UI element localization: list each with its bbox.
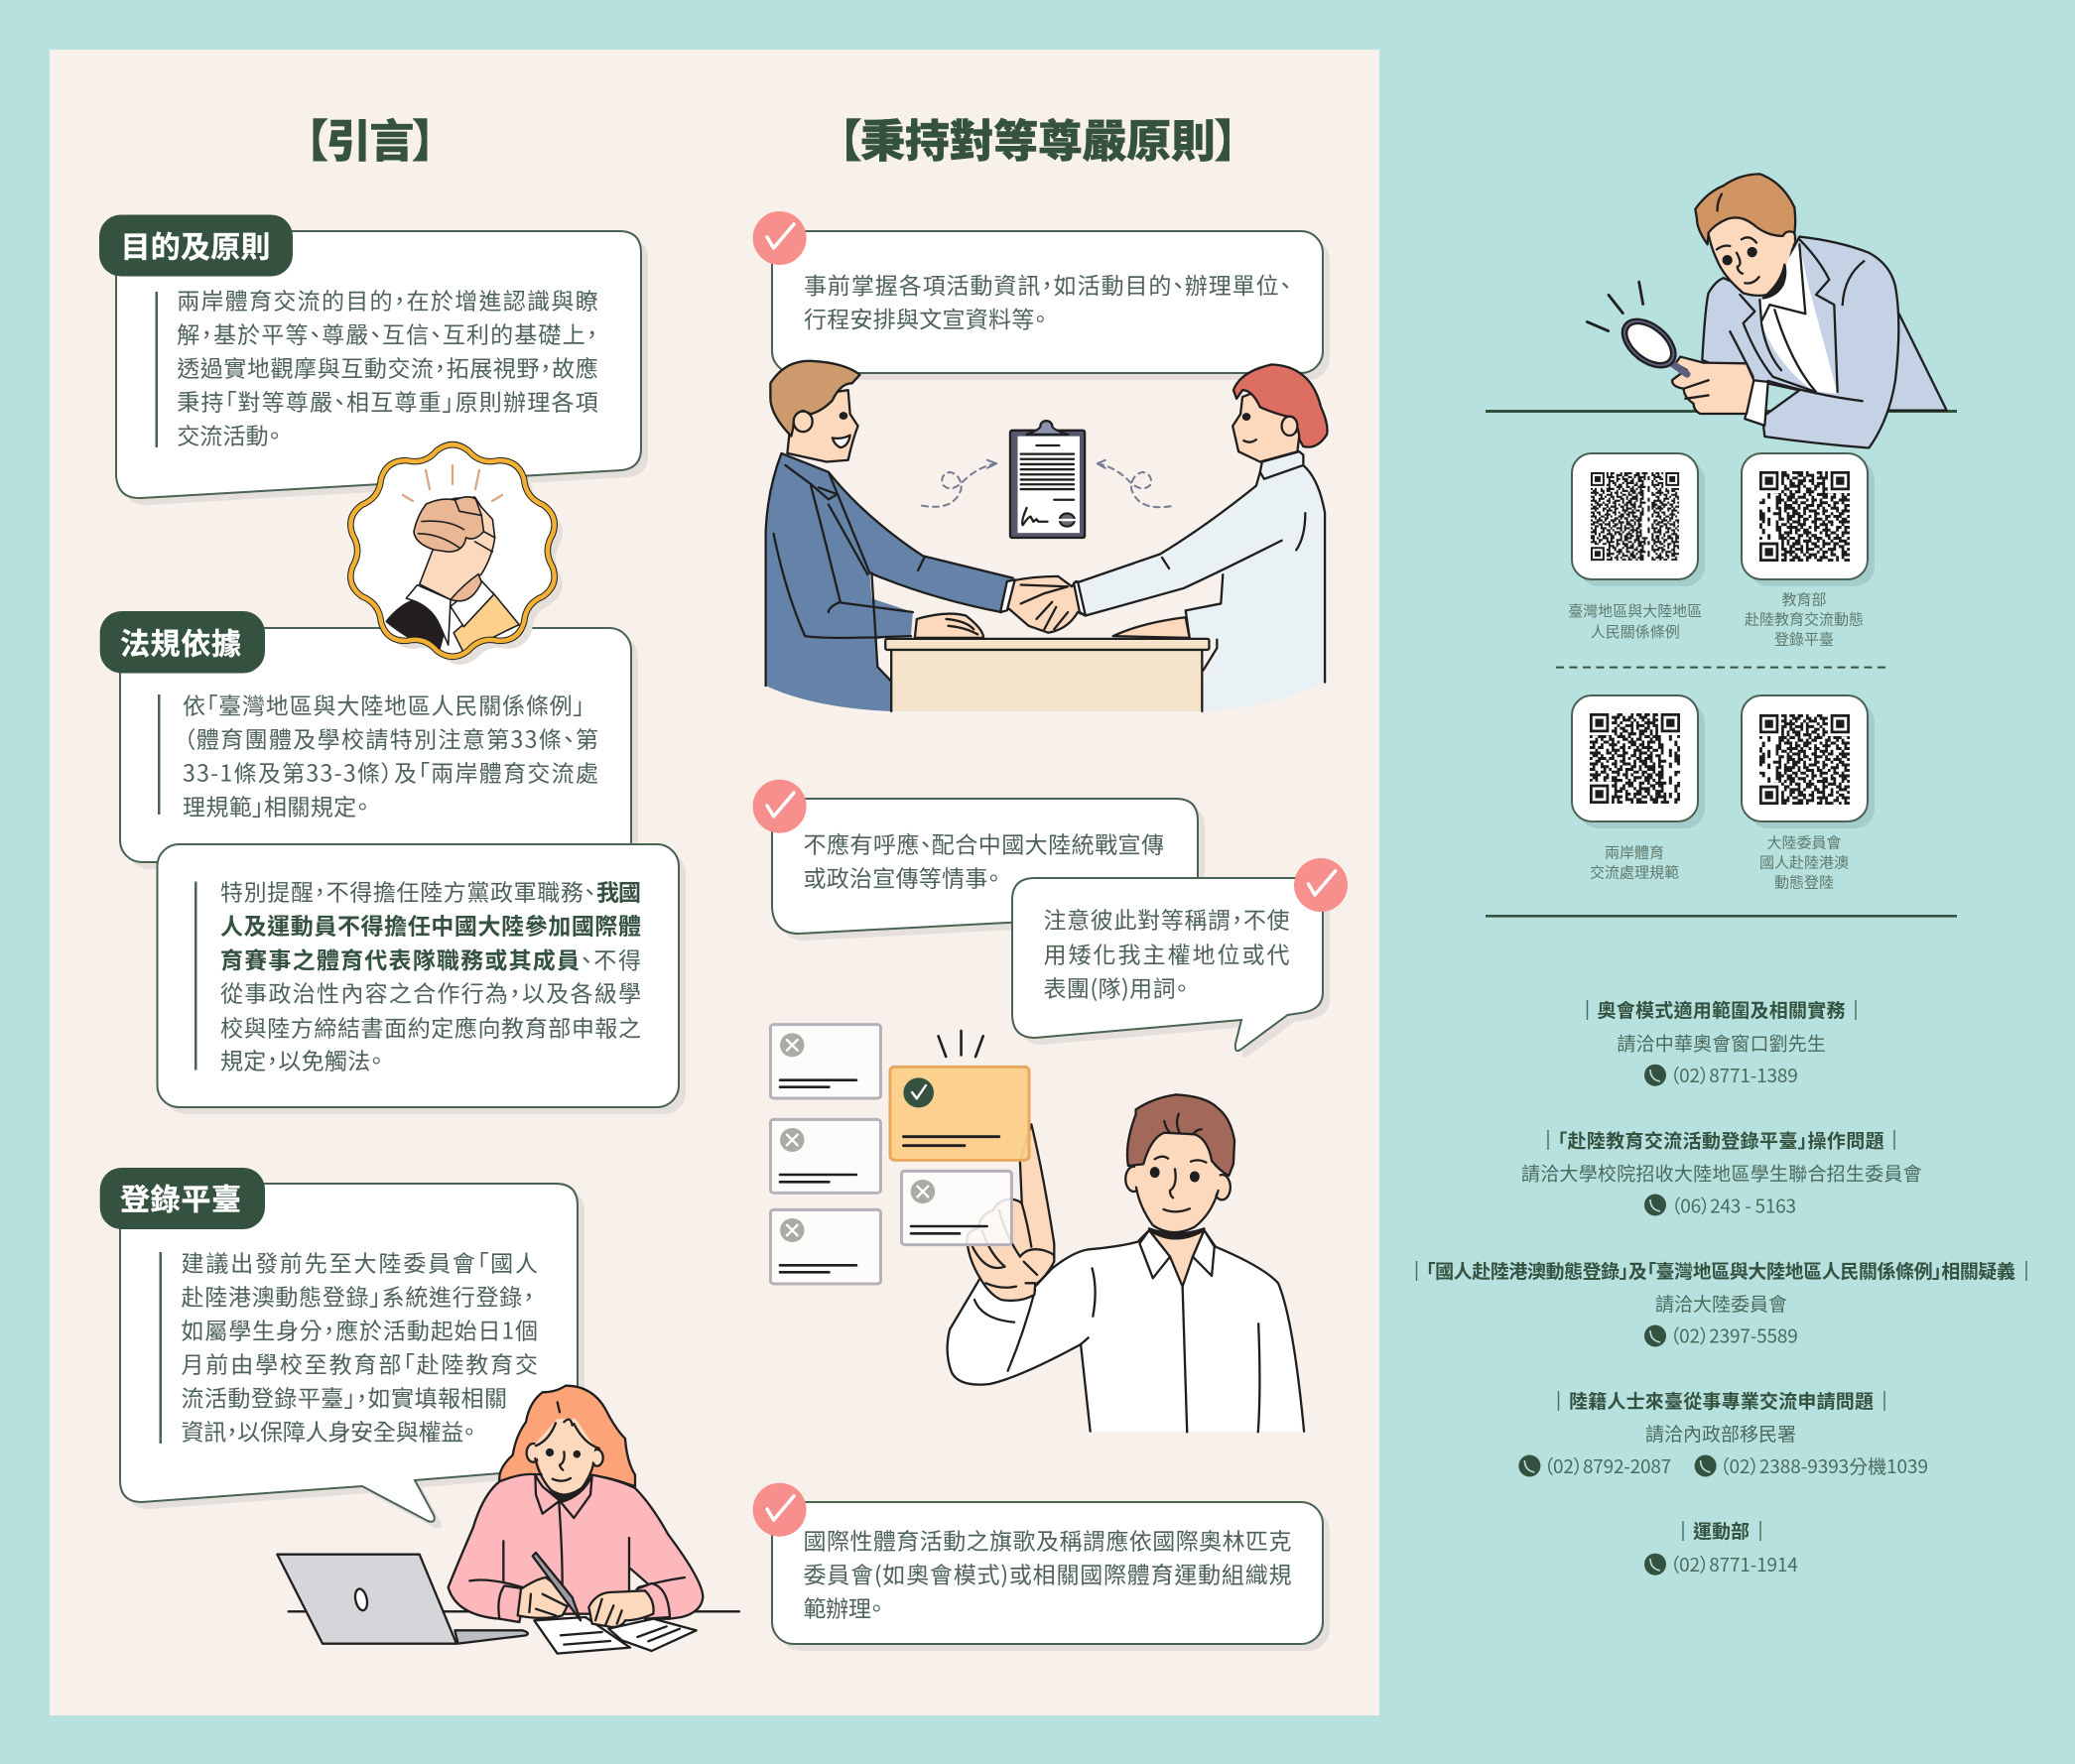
panel: 不應有呼應: [753, 780, 1205, 941]
contact: 赴陸教育交流活動登錄平臺: 「赴陸教育交流活動登錄平臺」操作問題: [1558, 1127, 1884, 1154]
text: 登錄平臺 body: 資訊，以保障人身安全與權益。: [181, 1414, 474, 1448]
contact: 陸籍人士來臺: [1518, 1387, 1928, 1479]
contact: 陸籍人士來臺: （02）8792-2087: [1544, 1452, 1671, 1479]
caption: 兩岸體育: [1605, 841, 1664, 862]
text: 國際性體育活動: 委員會(如奧會模式)或相關國際體育運動組織規: [804, 1557, 1292, 1590]
dashed divider: [1556, 667, 1886, 669]
text: 注意彼此對等稱謂: 用矮化我主權地位或代: [1044, 936, 1290, 969]
text: 事前掌握: [804, 267, 1291, 334]
tag: 目的及原則: 目的及原則: [121, 222, 270, 266]
main panel: [50, 50, 1379, 1715]
tag: 登錄平臺: [100, 1168, 265, 1229]
caption: 赴陸教育交流動態: [1745, 609, 1864, 630]
icon: check badge: [753, 211, 807, 265]
text: 注意彼此對等稱謂: [1044, 902, 1290, 1003]
text: 特別提醒 body: 特別提醒，不得擔任陸方黨政軍職務、: [220, 873, 595, 907]
illustration: man choosing cards: [770, 1025, 1304, 1432]
text: 不應有呼應: [804, 826, 1164, 894]
caption: 國人赴陸港澳: [1759, 852, 1849, 873]
caption: 動態登陸: [1774, 872, 1834, 893]
text: 特別提醒 body: 校與陸方締結書面約定應向教育部申報之: [220, 1009, 641, 1043]
contact: 運動部: [1644, 1517, 1798, 1577]
title: 引言: 【引言】: [306, 105, 435, 170]
contact: 陸籍人士來臺: 陸籍人士來臺從事專業交流申請問題: [1569, 1387, 1874, 1414]
text: 特別提醒 body: 從事政治性內容之合作行為，以及各級學: [220, 975, 641, 1009]
text: 特別提醒 body: 人及運動員不得擔任中國大陸參加國際體: [220, 908, 641, 942]
panel: 登錄平臺: [100, 1168, 584, 1529]
text: 國際性體育活動: 範辦理。: [804, 1589, 882, 1623]
illustration: man with magnifier: [1486, 174, 1957, 448]
icon: phone: [1695, 1454, 1717, 1476]
contact: 運動部: 運動部: [1693, 1517, 1750, 1544]
contact: 赴陸教育交流活動登錄平臺: （06）243 - 5163: [1671, 1193, 1796, 1219]
text: 目的及原則 body: 透過實地觀摩與互動交流，拓展視野，故應: [177, 350, 598, 384]
caption: 大陸委員會: [1766, 832, 1842, 853]
contact: 奧會模式: 請洽中華奧會窗口劉先生: [1617, 1030, 1826, 1057]
title: 秉持對等尊嚴原則: 【秉持對等尊嚴原則】: [839, 105, 1237, 170]
panel: 事前掌握: [753, 211, 1330, 380]
tag: 目的及原則: [99, 214, 293, 276]
contact: 奧會模式: （02）8771-1389: [1670, 1062, 1798, 1088]
text: 目的及原則 body: 解，基於平等、尊嚴、互信、互利的基礎上，: [177, 316, 597, 350]
text: 目的及原則 body: [177, 283, 598, 451]
text: 目的及原則 body: 兩岸體育交流的目的，在於增進認識與瞭: [177, 283, 598, 316]
text: 登錄平臺 body: 流活動登錄平臺」，如實填報相關: [181, 1380, 507, 1414]
text: 法規依據 body: （體育團體及學校請特別注意第33條、第: [184, 721, 598, 755]
contact: 國人赴陸港澳動態登錄: [1417, 1257, 2026, 1349]
illustration: handshake with contract: [766, 361, 1327, 711]
contact: 奧會模式: [1588, 996, 1856, 1088]
text: 特別提醒 body: 我國: [596, 873, 641, 907]
text: 注意彼此對等稱謂: 表團(隊)用詞。: [1044, 969, 1187, 1003]
panel: 目的及原則: [99, 214, 648, 505]
icon: check badge: [1294, 858, 1348, 912]
icon: phone: [1644, 1554, 1666, 1575]
tag: 登錄平臺: 登錄平臺: [120, 1175, 241, 1218]
text: 特別提醒 body: [220, 873, 641, 1076]
text: 特別提醒 body: 規定，以免觸法。: [220, 1043, 382, 1076]
text: 法規依據 body: 依「臺灣地區與大陸地區人民關係條例」: [183, 688, 584, 721]
panel: 法規依據: [100, 611, 638, 869]
contact: 國人赴陸港澳動態登錄: 「國人赴陸港澳動態登錄」及「臺灣地區與大陸地區人民關係條例」相關疑義: [1426, 1257, 2015, 1284]
illustration part: option cards: [770, 1025, 1011, 1284]
text: 登錄平臺 body: 月前由學校至教育部「赴陸教育交: [181, 1346, 538, 1380]
text: 登錄平臺 body: [181, 1244, 538, 1448]
icon: phone: [1518, 1454, 1540, 1476]
caption: 臺灣地區與大陸地區: [1568, 600, 1702, 621]
contact: 奧會模式: 奧會模式適用範圍及相關實務: [1598, 996, 1846, 1023]
text: 法規依據 body: 理規範」相關規定。: [183, 789, 368, 822]
icon: clasped hands badge: [350, 444, 563, 665]
QR card: 赴陸教育交流動態登錄平臺: [1742, 453, 1875, 650]
contact: 陸籍人士來臺: （02）2388-9393分機1039: [1720, 1452, 1928, 1479]
caption: 人民關係條例: [1591, 621, 1680, 642]
text: 特別提醒 body: 育賽事之體育代表隊職務或其成員: [220, 942, 580, 975]
panel: 國際性體育活動: [753, 1483, 1330, 1651]
contact: 陸籍人士來臺: 請洽內政部移民署: [1645, 1420, 1796, 1447]
text: 特別提醒 body: 、不得: [581, 942, 641, 975]
caption: 登錄平臺: [1774, 629, 1834, 650]
panel: 特別提醒: [157, 844, 686, 1114]
QR card: 兩岸體育交流處理規範: [1572, 695, 1705, 883]
icon: phone: [1644, 1065, 1666, 1086]
contact: 赴陸教育交流活動登錄平臺: 請洽大學校院招收大陸地區學生聯合招生委員會: [1521, 1160, 1922, 1187]
icon: check badge: [753, 780, 807, 833]
text: 登錄平臺 body: 赴陸港澳動態登錄」系統進行登錄，: [181, 1278, 534, 1312]
contact: 赴陸教育交流活動登錄平臺: [1521, 1127, 1922, 1219]
text: 登錄平臺 body: 如屬學生身分，應於活動起始日1個: [181, 1313, 538, 1346]
illustration: woman writing at laptop: [277, 1386, 739, 1654]
text: 不應有呼應: 或政治宣傳等情事。: [804, 860, 999, 894]
icon: phone: [1644, 1195, 1666, 1216]
QR card: 臺灣地區與大陸地區人民關係條例: [1568, 453, 1705, 642]
panel: 注意彼此對等稱謂: [1012, 858, 1348, 1058]
text: 不應有呼應: 不應有呼應、配合中國大陸統戰宣傳: [804, 826, 1164, 860]
text: 注意彼此對等稱謂: 注意彼此對等稱謂，不使: [1044, 902, 1290, 936]
tag: 法規依據: [100, 611, 265, 673]
icon: phone: [1644, 1325, 1666, 1347]
text: 目的及原則 body: 秉持「對等尊嚴、相互尊重」原則辦理各項: [177, 384, 598, 418]
text: 法規依據 body: [183, 688, 598, 822]
text: 登錄平臺 body: 建議出發前先至大陸委員會「國人: [181, 1244, 538, 1278]
contact: 國人赴陸港澳動態登錄: 請洽大陸委員會: [1655, 1290, 1787, 1317]
text: 法規依據 body: 33-1條及第33-3條）及「兩岸體育交流處: [183, 755, 598, 789]
text: 國際性體育活動: 國際性體育活動之旗歌及稱謂應依國際奧林匹克: [804, 1522, 1292, 1556]
text: 事前掌握: 事前掌握各項活動資訊，如活動目的、辦理單位、: [804, 267, 1291, 301]
tag: 法規依據: 法規依據: [120, 619, 241, 663]
text: 目的及原則 body: 交流活動。: [177, 418, 280, 451]
contact: 運動部: （02）8771-1914: [1670, 1551, 1798, 1577]
caption: 交流處理規範: [1590, 862, 1679, 883]
text: 事前掌握: 行程安排與文宣資料等。: [804, 301, 1046, 334]
text: 國際性體育活動: [804, 1522, 1292, 1623]
caption: 教育部: [1781, 588, 1827, 609]
icon: check badge: [753, 1483, 807, 1537]
contact: 國人赴陸港澳動態登錄: （02）2397-5589: [1670, 1323, 1798, 1349]
QR card: 大陸委員會國人赴陸港澳動態登陸: [1742, 695, 1875, 893]
